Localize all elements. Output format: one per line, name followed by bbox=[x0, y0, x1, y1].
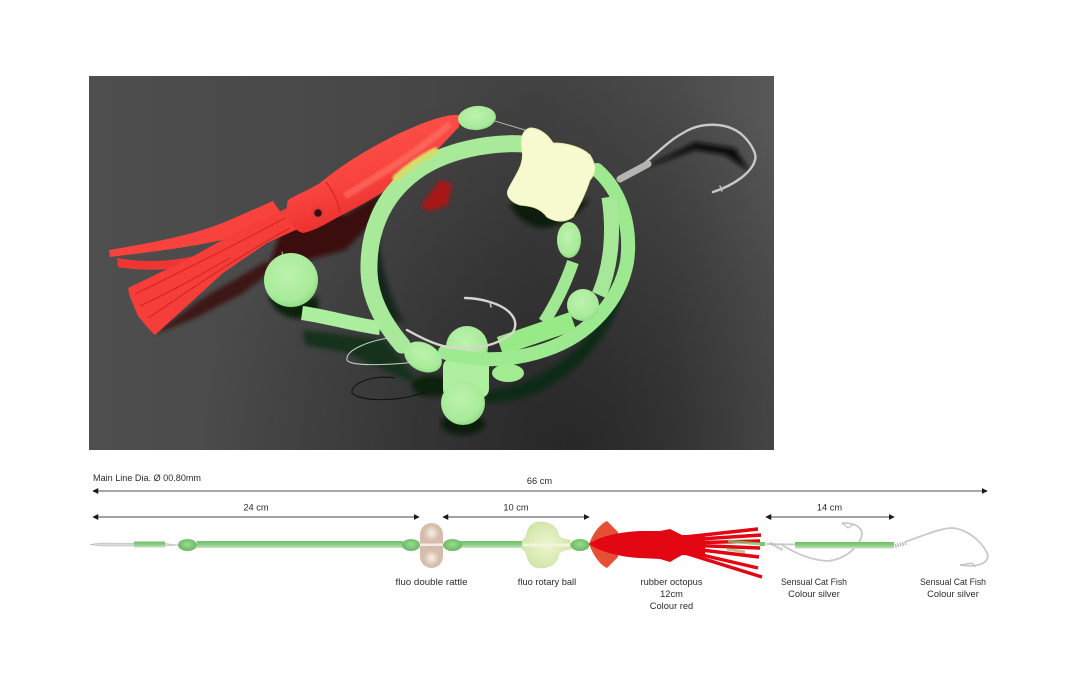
icon: fluo double rattle bbox=[420, 523, 443, 568]
panel: product photo bbox=[89, 76, 774, 450]
label: rubber octopus: Colour red bbox=[650, 601, 693, 611]
label: fluo rotary ball: fluo rotary ball bbox=[518, 577, 576, 587]
icon: thin black loop reflection bbox=[352, 377, 425, 400]
icon: silver hook, inner bbox=[407, 298, 515, 348]
label: main line diameter: Main Line Dia. Ø 00.80mm bbox=[93, 473, 201, 483]
label: Sensual Cat Fish, second: Colour silver bbox=[927, 589, 979, 599]
label: Sensual Cat Fish, second: Sensual Cat Fish bbox=[920, 577, 986, 587]
reflections and shadows on the dark surface bbox=[153, 142, 750, 435]
icon: Sensual Cat Fish hook, second bbox=[895, 528, 988, 567]
icon: rubber octopus bbox=[589, 521, 762, 577]
dimension: 14 cm bbox=[766, 502, 894, 517]
dimension: 10 cm: 10 cm bbox=[503, 502, 529, 512]
rig diagram: needle and green tubing bbox=[90, 539, 526, 551]
icon: silver hook, outer bbox=[620, 125, 755, 192]
label: rubber octopus: 12cm bbox=[660, 589, 683, 599]
icon: clear leader loop bbox=[347, 337, 445, 365]
label: rubber octopus: rubber octopus bbox=[640, 577, 703, 587]
label: Sensual Cat Fish, first: Sensual Cat Fish bbox=[781, 577, 847, 587]
green beads bbox=[264, 104, 599, 425]
icon: Sensual Cat Fish hook, first bbox=[760, 523, 894, 561]
dimension: 24 cm: 24 cm bbox=[243, 502, 269, 512]
label: Sensual Cat Fish, first: Colour silver bbox=[788, 589, 840, 599]
total length dimension: 66 cm: 66 cm bbox=[527, 476, 552, 486]
green tube ring bbox=[282, 116, 628, 359]
cream rotary ball bbox=[508, 128, 595, 221]
red squid lure bbox=[109, 115, 459, 335]
dimension: 14 cm: 14 cm bbox=[817, 502, 842, 512]
icon: fluo rotary ball bbox=[522, 522, 590, 568]
label: fluo double rattle: fluo double rattle bbox=[396, 577, 468, 587]
